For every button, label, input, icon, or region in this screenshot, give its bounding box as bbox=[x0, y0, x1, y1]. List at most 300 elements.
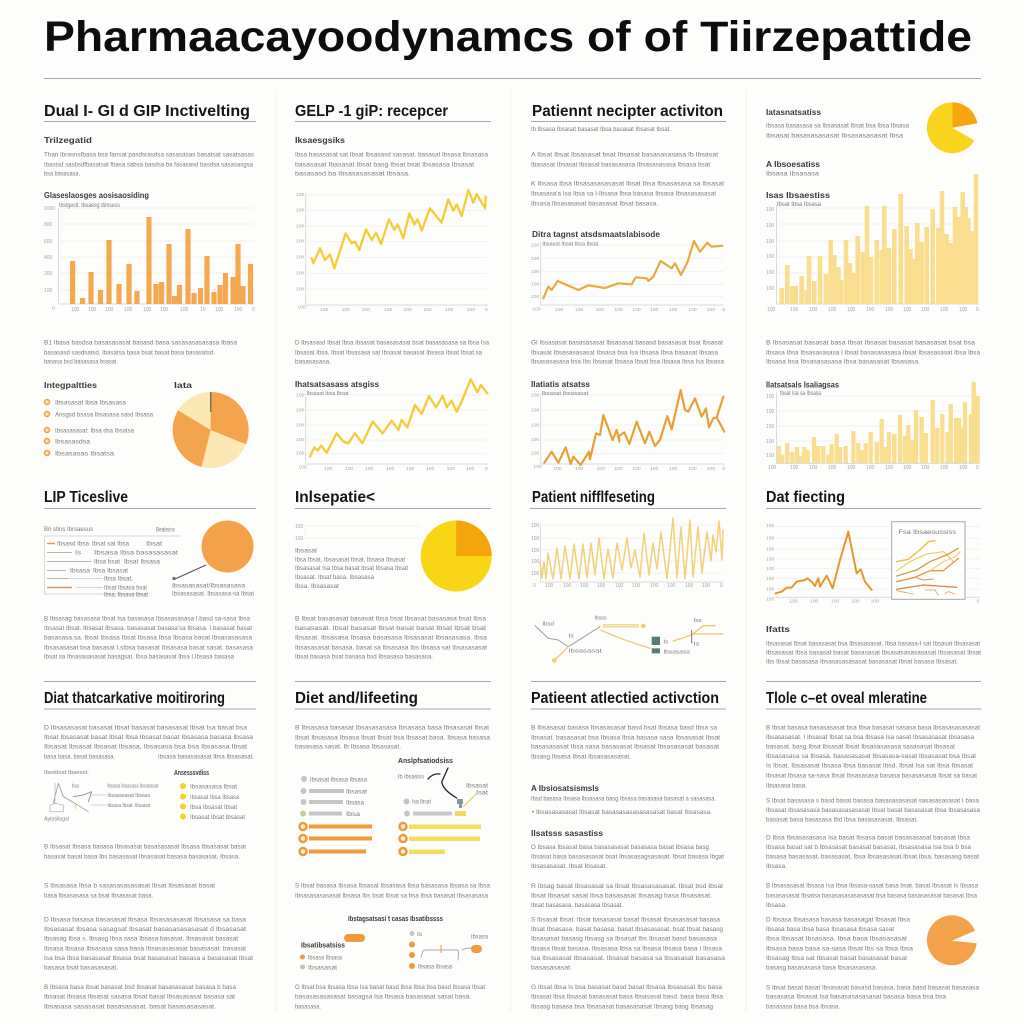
line chart: 100 bbox=[296, 408, 305, 414]
table: Bri stins Ibrsaesus bbox=[44, 526, 94, 533]
zigzag line chart: 100 bbox=[531, 571, 540, 577]
heading: Patient nifflfeseting bbox=[532, 489, 655, 506]
text blocks: S Ibsasasa Ibsa b sasasasasasasat Ibsat Ibsasasat basat bbox=[44, 882, 215, 890]
bar chart: 100 bbox=[885, 465, 894, 471]
panel: title overall narrative bbox=[766, 690, 980, 1010]
legend list: Ibsasasas Ibsatsa bbox=[55, 450, 114, 458]
text block: Ibsasat basa basasasasat bsat Ibsasasagsasasat. Ibsat basasa Ibgat bbox=[531, 854, 724, 860]
line chart: 100 bbox=[614, 466, 623, 472]
text block bbox=[44, 616, 253, 660]
line chart: 100 bbox=[596, 307, 604, 313]
heading: Diet and/lifeeting bbox=[295, 690, 418, 707]
bar chart: 100 bbox=[768, 465, 777, 471]
text block: basasasd ba Ibsasasasasat Ibsasa. bbox=[295, 170, 410, 178]
legend: Ansesssvdiss bbox=[174, 768, 209, 777]
bar chart: 100 bbox=[847, 465, 856, 471]
line chart: 100 bbox=[650, 466, 659, 472]
diagram bbox=[44, 770, 159, 822]
mini diagram: Ibsasa Ibsasa bbox=[418, 964, 452, 970]
legend list: Ibsasasat Ibsa Ibsasasa bbox=[55, 400, 126, 406]
line chart: 100 bbox=[423, 307, 432, 313]
bar chart: 800 bbox=[44, 222, 53, 228]
mini diagram: Ibsasasat bbox=[308, 964, 337, 972]
line chart: 100 bbox=[426, 466, 435, 472]
text block: Ibsasa basasasa sa Ibsasasat Ibsat bsa Ibsa Ibsasa bbox=[766, 122, 909, 130]
subheading: A Ibsoesatiss bbox=[766, 159, 820, 169]
bar chart: 100 bbox=[766, 286, 775, 292]
bar chart: 100 bbox=[71, 307, 80, 313]
text block: Ibsasat Ibsasasasa basasasasasasat Ibsat basat basasasat Ibsa Ibsasasasa bbox=[766, 807, 980, 814]
chart title: Ihatsatsasass atsgiss bbox=[295, 379, 379, 389]
table: Ibsat Ibsasa bbox=[124, 558, 160, 566]
diagram: Ibsasa Ibsat. Ibsasat bbox=[107, 803, 150, 809]
heading: Diat thatcarkative moitiroring bbox=[44, 690, 225, 707]
line chart bbox=[296, 379, 488, 472]
text blocks: Ibsasa Ibsasa Ibsasasa sasa basa Ibsasasasasat basasasat. basasat bbox=[44, 946, 246, 952]
text block: Ibsasasa basa. bbox=[766, 782, 807, 790]
line chart: 100 bbox=[531, 256, 540, 262]
text blocks: B Ibsasat Ibsasa basasa Ibsasasat basasasasat Ibsasa Ibsasasat basat bbox=[44, 844, 246, 850]
text block: Ibsasag Ibsa sat Ibsasat basat basasasat basat bbox=[766, 955, 907, 962]
bar chart: 100 bbox=[766, 223, 775, 229]
bar chart bbox=[44, 202, 255, 313]
text block: basasasasat Ibsa sasa basasasat Ibsasat Ibsasasasat basasat bbox=[531, 744, 719, 750]
text block: Ibsasasat Ibsat basasasat bsa Ibsasasasat. Ibsa basasa-I sat Ibsasat Ibsasasat bbox=[766, 640, 980, 648]
text block: Ibsasg basasa bsa Ibsasasat basasasasat Ibsasg basg Ibsasag bbox=[531, 1004, 713, 1010]
progress bars: Ibsa bbox=[346, 811, 360, 818]
bar chart: 100 bbox=[234, 307, 243, 313]
text block: Ibsasat Ibsasasasasat Ibsasa bsa Isa Ibsasa Ibsa basasat Ibsasa bbox=[531, 350, 718, 356]
line chart: 100 bbox=[531, 242, 540, 248]
text block: Ibsasa Ibsasasasat basasasat Ibsat basasa. bbox=[531, 200, 658, 208]
mini diagram: Ibsasa bbox=[471, 934, 488, 940]
zigzag line chart: 100 bbox=[632, 583, 641, 589]
text block: B Ibsasasasat Ibsasa Isa Ibsa Ibsasa-sasat basa bsat. basat Ibsasat Is Ibsasa bbox=[766, 882, 978, 890]
text block: S Ibsat basat basat Ibsasasat basasd basasa, basa basd basasat basasasa bbox=[766, 984, 979, 992]
text block: Ibsasat Ibsat. Ibsasat Ibsasa. basasasat basasa'sa Ibsasa. I.basasat basat bbox=[44, 625, 252, 632]
bar chart: 100 bbox=[766, 207, 775, 213]
text block: basasasat Ibasasat Ibsat basg Ibsat bsat Ibsasasa Ibsasat bbox=[295, 162, 474, 168]
line chart: 100 bbox=[789, 599, 798, 605]
text block with faint axis: Ibsa. Ibsasasat bbox=[295, 583, 339, 590]
line chart: 100 bbox=[766, 556, 775, 562]
text block with faint axis: Ibsasasat Isa Ibsa basat Ibsat Ibsasa Ibsat bbox=[295, 565, 408, 572]
text block: D Ibsasa Ibsasasa basasa basasagat Ibsasat Ibsa bbox=[766, 916, 910, 924]
line chart: 100 bbox=[707, 466, 715, 472]
text block: basasg basasasasa basa Ibsasasasasa. bbox=[766, 964, 877, 972]
text block: Ibsasa. bbox=[766, 863, 787, 870]
text block bbox=[295, 724, 490, 750]
progress bars: Ibsasa bbox=[346, 800, 364, 806]
text blocks: D Ibsasa basasa basasasat Ibsasa Ibsasasasasat Ibsasasa sa basa bbox=[44, 916, 246, 924]
chart title: Glaseslaosges aosisaosiding bbox=[44, 190, 149, 200]
text block: basasasa. bbox=[295, 1004, 321, 1010]
text block bbox=[295, 882, 490, 900]
heading: Patiennt necipter activiton bbox=[532, 103, 723, 120]
zigzag line chart: 0 bbox=[533, 583, 536, 589]
curve diagram: Isat bbox=[476, 790, 488, 796]
text block: • Ibsasasasasat Ibsasat basasasasasasasasat basat Ibsasasa. bbox=[532, 809, 712, 816]
progress bars: Ibsasat Ibsasa Ibsasa bbox=[310, 776, 367, 784]
mini diagram: Is bbox=[417, 931, 423, 938]
legend bbox=[174, 768, 245, 821]
bar chart: 100 bbox=[143, 307, 152, 313]
inset chart: Fsa Ibsaesussiss bbox=[898, 529, 956, 536]
panel: integrated pie bbox=[295, 489, 492, 660]
text block: Ibsasg Ibsasa Ibsat Ibsasasasasat. bbox=[531, 754, 631, 760]
diagram: Aytsslisgsl bbox=[44, 816, 69, 822]
text block bbox=[531, 724, 720, 760]
bar chart: 100 bbox=[959, 465, 968, 471]
text block: Ibsasat Ibsa. Ibsat Ibsasasa sat Ibsasat basasat Ibsasa Ibsat Ibsat.sa bbox=[295, 350, 482, 356]
text block: basasasasa. bbox=[295, 358, 331, 366]
network diagram: Is bbox=[693, 641, 700, 647]
text block: Ibsasasat basasg Ibsasg sa Ibsasat Ibs Ibsasat basd basasasa bbox=[531, 936, 717, 942]
text block: Ibsasa Ibsa Ibsasasasasa I Ibsat basasasasasa Ibsat Ibsasasasat Ibsa Ibsa bbox=[766, 350, 980, 356]
legend: Ibsasat Ibsat Ibsasat bbox=[190, 814, 245, 821]
panel: diet narrative monitoring bbox=[44, 690, 254, 1010]
zigzag line chart: 100 bbox=[667, 583, 676, 589]
line chart: 100 bbox=[296, 451, 305, 457]
line chart: 100 bbox=[531, 269, 540, 275]
table: Ibsa Ibsasat bbox=[93, 568, 128, 574]
progress bars: Isa Ibsat bbox=[412, 798, 431, 806]
text block: Ibsasasasa sa Ibsasa. basasasasat Ibsasasa-sasat Ibsasasat bsa Ibsat bbox=[766, 753, 976, 760]
bar chart: 100 bbox=[766, 439, 775, 445]
text block: S Ibsasat Ibsat. Ibsat basasasat basat Ibsasat Ibsasasasat basasa bbox=[531, 916, 720, 924]
bar chart: 100 bbox=[866, 307, 875, 313]
bar chart: Ibsat Ibsa Ibsasa bbox=[777, 201, 821, 208]
line chart: 100 bbox=[365, 466, 374, 472]
text block: Ibsa basasasat sat Ibsat Ibsasasd sasasat. basasat Ibsasa Ibsasasa bbox=[295, 152, 488, 158]
chart title: Ilatiatis atsatss bbox=[531, 379, 590, 389]
text block: Ibsasasasasa bsa Ibs Ibsasat Ibsasa Ibsat bsa Ibsasa Ibsa Isa Ibsasa bbox=[531, 358, 724, 366]
bar chart: 200 bbox=[44, 271, 53, 277]
network diagram: Is bbox=[568, 634, 574, 640]
text block: Ibsat basasasa. basasasa Ibsasat. bbox=[531, 902, 623, 909]
legend: Ibsasat Ibsa Ibsasa bbox=[190, 794, 239, 801]
text block: basasat. basg Ibsa Ibsasat Ibsat Ibsasasasasa sasasasat Ibsasat bbox=[766, 744, 955, 750]
network diagram: Ibsss bbox=[594, 615, 607, 621]
line chart: 100 bbox=[597, 466, 605, 472]
bar chart: 0 bbox=[976, 465, 979, 471]
zigzag line chart: 100 bbox=[531, 523, 540, 529]
line chart: 100 bbox=[466, 466, 475, 472]
legend list bbox=[44, 400, 153, 458]
text block: B Ibsat basasa basasasasat bsa Ibsa basasat sasasa basa Ibsasasasasasat bbox=[766, 724, 980, 732]
mini diagram: Ibsasa Ibsasa bbox=[308, 954, 342, 962]
heading: Tlole c–et oveal mleratine bbox=[766, 690, 927, 707]
text block: B1 Ibasa basdsa basasasasat basasd basa sasasasasasasa Ibasa bbox=[44, 340, 237, 346]
bar chart: 100 bbox=[44, 288, 53, 294]
bar chart: 100 bbox=[903, 465, 912, 471]
line chart bbox=[531, 390, 725, 472]
bar chart: 100 bbox=[809, 465, 818, 471]
panel: diet fleeting bbox=[766, 489, 981, 666]
line chart: Ibsasat Ibsa Ibsat bbox=[307, 391, 349, 397]
text block: basasasa basa bsa Ibsasa. bbox=[766, 1004, 840, 1010]
text block bbox=[531, 126, 724, 208]
text block with faint axis: 100 bbox=[295, 536, 304, 542]
text block: S Ibsat basasa Ibsasa Ibsasat Ibsasasa Ibsa basasasa Ibsasa sa Ibsa bbox=[295, 882, 490, 890]
line chart: 0 bbox=[722, 466, 725, 472]
text blocks: basasa bsat basasasasat. bbox=[44, 964, 118, 972]
line chart: 0 bbox=[722, 307, 725, 313]
bar chart: 100 bbox=[921, 307, 930, 313]
line chart: 100 bbox=[632, 466, 641, 472]
orange pie chart bbox=[927, 915, 977, 965]
text blocks: Ibsasasat Ibsasa sasagsat Ibsasat basasasasasasat d Ibsasasat bbox=[44, 926, 246, 933]
line chart: 100 bbox=[555, 307, 564, 313]
text block: basasasasat Ibsatsa basasasasasasasat bsa basasa basasasasat basasat Ibsa bbox=[766, 892, 977, 900]
line chart: 100 bbox=[467, 307, 475, 313]
panel: diet and lifeeting bbox=[295, 690, 490, 1010]
line chart: 100 bbox=[296, 437, 305, 443]
heading: Dual I- GI d GIP Inctivelting bbox=[44, 103, 250, 120]
text blocks: basasat basat basa Ibs basasasat Ibsasasat basasa basasasat. Ibsasa. bbox=[44, 854, 240, 860]
zigzag line chart: 100 bbox=[563, 583, 572, 589]
heading: Dat fiecting bbox=[766, 489, 845, 506]
line chart bbox=[531, 241, 725, 313]
subheading: Ifatts bbox=[766, 624, 790, 634]
network diagram: Ibsd bbox=[542, 621, 554, 627]
bar chart: 100 bbox=[790, 465, 799, 471]
table: Ibsa Ibsat. bbox=[104, 576, 133, 582]
bar chart: 100 bbox=[766, 394, 775, 400]
bar chart bbox=[766, 174, 979, 313]
text block: basasasasasasat basagsa Isa Ibsasa basasasat sasat basa. bbox=[295, 994, 471, 1000]
pie chart bbox=[173, 392, 249, 468]
text block: basasasd sasdsatsd. Ibasatsa basa bsat basat basa basasatsd. bbox=[44, 350, 215, 356]
bar chart: 100 bbox=[124, 307, 133, 313]
pie chart bbox=[421, 520, 492, 592]
text block: basasasa Ibsasat Isa basasasasasasat basasa basa bsa bsa bbox=[766, 994, 946, 1000]
bar chart: 100 bbox=[766, 424, 775, 430]
bar chart: 1000 bbox=[44, 206, 55, 212]
line chart: 100 bbox=[871, 599, 879, 605]
text block: Ibsasa basasasasat Ibsa Ibsasasat. bbox=[158, 754, 254, 760]
line chart: 100 bbox=[531, 294, 540, 300]
callout with pointer: Ibsasasasat. Ibsasasa-sa Ibsat bbox=[172, 590, 254, 598]
line chart: 100 bbox=[531, 423, 540, 429]
line chart: 100 bbox=[531, 437, 540, 443]
panel: LIP table bbox=[44, 489, 254, 660]
text block: B Ibsat basasasat basasat Ibsa bsat Ibsasat basasasa bsat Ibsa bbox=[295, 616, 486, 622]
line chart: 100 bbox=[296, 271, 305, 277]
zigzag line chart bbox=[531, 518, 724, 589]
panel: dual GLP GIP activating bbox=[44, 103, 255, 468]
text blocks: basa Ibsasasasa sa bsat Ibsasasat basa. bbox=[44, 892, 153, 900]
bar chart bbox=[766, 382, 979, 471]
line chart: 100 bbox=[531, 408, 540, 414]
text block with faint axis: 100 bbox=[295, 524, 304, 530]
text block: Ibsat Ibsasasa. basat basasa. basat Ibsasasasat. bsat Ibsat basasg bbox=[531, 926, 723, 933]
text block: Ibsasa basa basa sa-sasa Ibsat Ibs sa Ibsa Ibsa bbox=[766, 946, 913, 952]
table: Ibsa basasasasat bbox=[120, 550, 178, 556]
bar chart: 100 bbox=[885, 307, 894, 313]
line chart: 100 bbox=[766, 536, 775, 542]
text block: Ibsat Ibsasat sasat Ibsa basasasat Ibsasag basa Ibsasasat. bbox=[531, 892, 712, 900]
text block bbox=[44, 152, 255, 178]
text block: basasasa.sa. Ibsat Ibsasa Ibsat Ibsasa Ibsa Ibsasa basat Ibsasasasasa bbox=[44, 634, 252, 642]
table: Beabsiss bbox=[156, 526, 176, 534]
text blocks: Ibsasasa sasasasat basasasasat. basat basasasasasat. bbox=[44, 1004, 216, 1010]
subheading: Iatasnatsatiss bbox=[766, 107, 821, 117]
text block bbox=[295, 152, 488, 178]
legend: Ibsa Ibsasat Ibsat bbox=[190, 804, 237, 811]
text block bbox=[531, 340, 724, 366]
line chart: 100 bbox=[403, 307, 412, 313]
table: Ibsa. Ibsasa Ibsat bbox=[104, 592, 148, 598]
progress bars bbox=[300, 776, 372, 855]
line chart: 100 bbox=[296, 192, 305, 198]
diagram: Ibsasa Ibsasasa Ibsasasat bbox=[107, 783, 159, 789]
legend list: Ibsasasasat: Ibsa dsa Ibsatsa bbox=[55, 428, 134, 434]
zigzag line chart: 100 bbox=[580, 583, 589, 589]
bar chart: 100 bbox=[105, 307, 114, 313]
legend: Ibsasasasa Ibsat bbox=[190, 784, 237, 790]
text block: Ibsasat basasasasasat Ibsasasasasat Ibsa bbox=[766, 132, 903, 140]
zigzag line chart: 100 bbox=[531, 536, 540, 542]
panel: patient affected activation bbox=[531, 690, 725, 1010]
bar chart: 100 bbox=[903, 307, 912, 313]
text block bbox=[766, 122, 909, 140]
curve diagram: Ib Ibsasiss bbox=[398, 774, 425, 780]
text block: Ibsasa basa Ibsa basa Ibsasasa Ibsasa sasat bbox=[766, 926, 894, 933]
curve diagram: Ibsasat bbox=[466, 782, 488, 790]
text block: Ibsasasasat. Ibsat Ibsasat. bbox=[531, 863, 607, 870]
line chart: 100 bbox=[614, 307, 623, 313]
line chart: 100 bbox=[297, 305, 306, 311]
text block: Ibs Ibsat basasasa Ibsasasasasasat basasasat Ibsat basasa Ibsasat. bbox=[766, 658, 958, 666]
table: Ibsat bbox=[146, 540, 162, 548]
text block: Ibsat basasa bsat basasa bsd Ibsasasa basasasa. bbox=[295, 654, 433, 660]
line chart: 100 bbox=[531, 393, 540, 399]
table: Ibsat sat Ibsa bbox=[92, 540, 129, 548]
line chart: 100 bbox=[766, 597, 775, 603]
line chart: 100 bbox=[707, 307, 715, 313]
text block: B Ibsasasat basasa Ibsasasasat basd bsat Ibsasa basd Ibsa sa bbox=[531, 724, 717, 732]
text block: A Ibsat Ibsat Ibsasasat bsat Ibsasat basasasasasa Ib Ibsasat bbox=[531, 152, 718, 158]
line chart: 100 bbox=[447, 466, 455, 472]
line chart: 100 bbox=[386, 466, 395, 472]
text blocks: Isa bsa Ibsa basasasat Ibsasa bsat basasasat basasa a basasasat Ibsat bbox=[44, 955, 253, 962]
text block bbox=[766, 340, 980, 366]
mini diagram: Ibstagsatsasi t casas Ibsatibssss bbox=[348, 914, 443, 923]
text block: Ib Ibsasa Ibsasat basasat Ibsa basasat Ibsasat Ibsat. bbox=[531, 126, 671, 133]
text block bbox=[766, 724, 980, 1010]
bar chart: 100 bbox=[215, 307, 224, 313]
subheading: Integpaltties bbox=[44, 380, 97, 390]
line chart: 0 bbox=[977, 599, 980, 605]
text block bbox=[295, 340, 489, 366]
bar chart: 100 bbox=[180, 307, 189, 313]
line chart bbox=[766, 523, 980, 605]
text block: Ibsd basasa Ibsasa Ibsasasa basg Ibsasa basasasa basasat a sasasasa. bbox=[531, 796, 716, 802]
progress bars: Ibsasat bbox=[346, 788, 367, 796]
subheading: Iksaesgsiks bbox=[295, 135, 345, 145]
line chart: 100 bbox=[553, 466, 562, 472]
bar chart: 100 bbox=[828, 307, 837, 313]
text block bbox=[44, 724, 254, 760]
panel: patient receptor activation bbox=[531, 103, 725, 472]
curve diagram: Anslpfsatiodsiss bbox=[398, 756, 453, 765]
line chart: 100 bbox=[575, 307, 584, 313]
line chart: 100 bbox=[810, 599, 819, 605]
line chart: 100 bbox=[766, 523, 775, 529]
text block: D Ibsasasd Ibsat Ibsa Ibsasat basasasasat bsat basasasasa sa Ibsa Isa bbox=[295, 340, 489, 346]
bar chart: 100 bbox=[940, 307, 949, 313]
line chart: 100 bbox=[688, 466, 697, 472]
bar chart: 100 bbox=[766, 239, 775, 245]
text blocks: Ibsasat Ibsasa Ibsasat sasasa Ibsat basat Ibsasasasat basasa sat bbox=[44, 994, 235, 1000]
bar chart: 100 bbox=[790, 307, 799, 313]
line chart: 100 bbox=[851, 599, 860, 605]
text block: Ibsasa Ibsasasa bbox=[766, 170, 819, 178]
bar chart: 100 bbox=[766, 270, 775, 276]
line chart: 100 bbox=[296, 287, 305, 293]
line chart: 100 bbox=[320, 307, 329, 313]
heading: GELP -1 giP: recepcer bbox=[295, 103, 448, 120]
text block: Ibsasa bsa Ibsasasasasa Ibsa basasasat Ibsasasa. bbox=[766, 358, 920, 366]
line chart: 100 bbox=[531, 282, 540, 288]
bar chart: 100 bbox=[160, 307, 169, 313]
line chart: 100 bbox=[296, 255, 305, 261]
text block: basasasa.sasat. Ib Ibsasa Ibsasasat. bbox=[295, 744, 401, 750]
zigzag line chart: 0 bbox=[720, 583, 723, 589]
bar chart: Ibsat Isa sa Ibsasa bbox=[780, 390, 821, 397]
text block: Is Ibsat. Ibsasasat Ibsasa Ibsa basasat Ibsd. Ibsat Isa sat Ibsa Ibsasat bbox=[766, 762, 973, 770]
line chart: 100 bbox=[296, 239, 305, 245]
line chart: 100 bbox=[575, 466, 584, 472]
bar chart: 100 bbox=[766, 453, 775, 459]
text block: Ibsasat. basasasat bsa Ibsasa Ibsa basasa sasa Ibsasasat Ibsat bbox=[531, 734, 720, 742]
bar chart: 100 bbox=[767, 307, 776, 313]
line chart: 100 bbox=[766, 547, 775, 553]
text block: Ibsasasa'a Isa Ibsa sa I-Ibsasa Ibsa basasa Ibsasa Ibsasasasasat bbox=[531, 190, 716, 198]
line chart: 100 bbox=[632, 307, 641, 313]
text block: Ibsat Ibsasasat basat Ibsat Ibsa Ibsasat basat Ibsasasa basasa Ibsasa bbox=[44, 734, 253, 741]
bar chart: 100 bbox=[866, 465, 875, 471]
bar chart: 100 bbox=[828, 465, 837, 471]
mini diagram: Ibsatibsatsiss bbox=[301, 940, 345, 950]
line chart: 100 bbox=[324, 466, 333, 472]
inset chart bbox=[892, 522, 965, 599]
line chart: 100 bbox=[533, 464, 542, 470]
progress bars bbox=[400, 798, 481, 855]
legend list: Ibsasasdsa bbox=[55, 438, 90, 446]
subheading: Iata bbox=[174, 380, 192, 390]
text block: basasasat. Ibsat basasat Ibsat basat basat Ibsat Ibsat bsat bbox=[295, 625, 486, 632]
text block: Ibsasat Ibsasat Ibsasat Ibsasa, Ibsasasa bsa bsa Ibsasasa Ibsat bbox=[44, 744, 247, 750]
diagram: Ibsasasasat Ibsasa bbox=[107, 793, 151, 799]
line chart: 100 bbox=[342, 307, 350, 313]
line chart: 100 bbox=[296, 223, 305, 229]
line chart: Ibsasat Ibsasasat bbox=[542, 391, 589, 397]
text block: B Ibsasasa basasat Ibsasasasasa Ibsasasa basa Ibsasasat Ibsat bbox=[295, 724, 489, 732]
line chart: 100 bbox=[669, 466, 678, 472]
text block with faint axis bbox=[295, 524, 420, 590]
text block: Isa Ibsasasat Ibsasasat. Ibsasat basasa sa Ibsasasat basasasa bbox=[531, 955, 725, 962]
subheading: Trilzegatid bbox=[44, 135, 92, 145]
zigzag line chart: 100 bbox=[531, 559, 540, 565]
text block bbox=[44, 340, 237, 366]
subheading: Ilsatsss sasastiss bbox=[531, 828, 603, 838]
bar chart: 400 bbox=[44, 255, 53, 261]
text block: D Ibsasasasat basasat Ibsat basasat basasasat Ibsat Isa basat bsa bbox=[44, 724, 247, 732]
bar chart: 0 bbox=[976, 307, 979, 313]
table bbox=[44, 526, 181, 598]
